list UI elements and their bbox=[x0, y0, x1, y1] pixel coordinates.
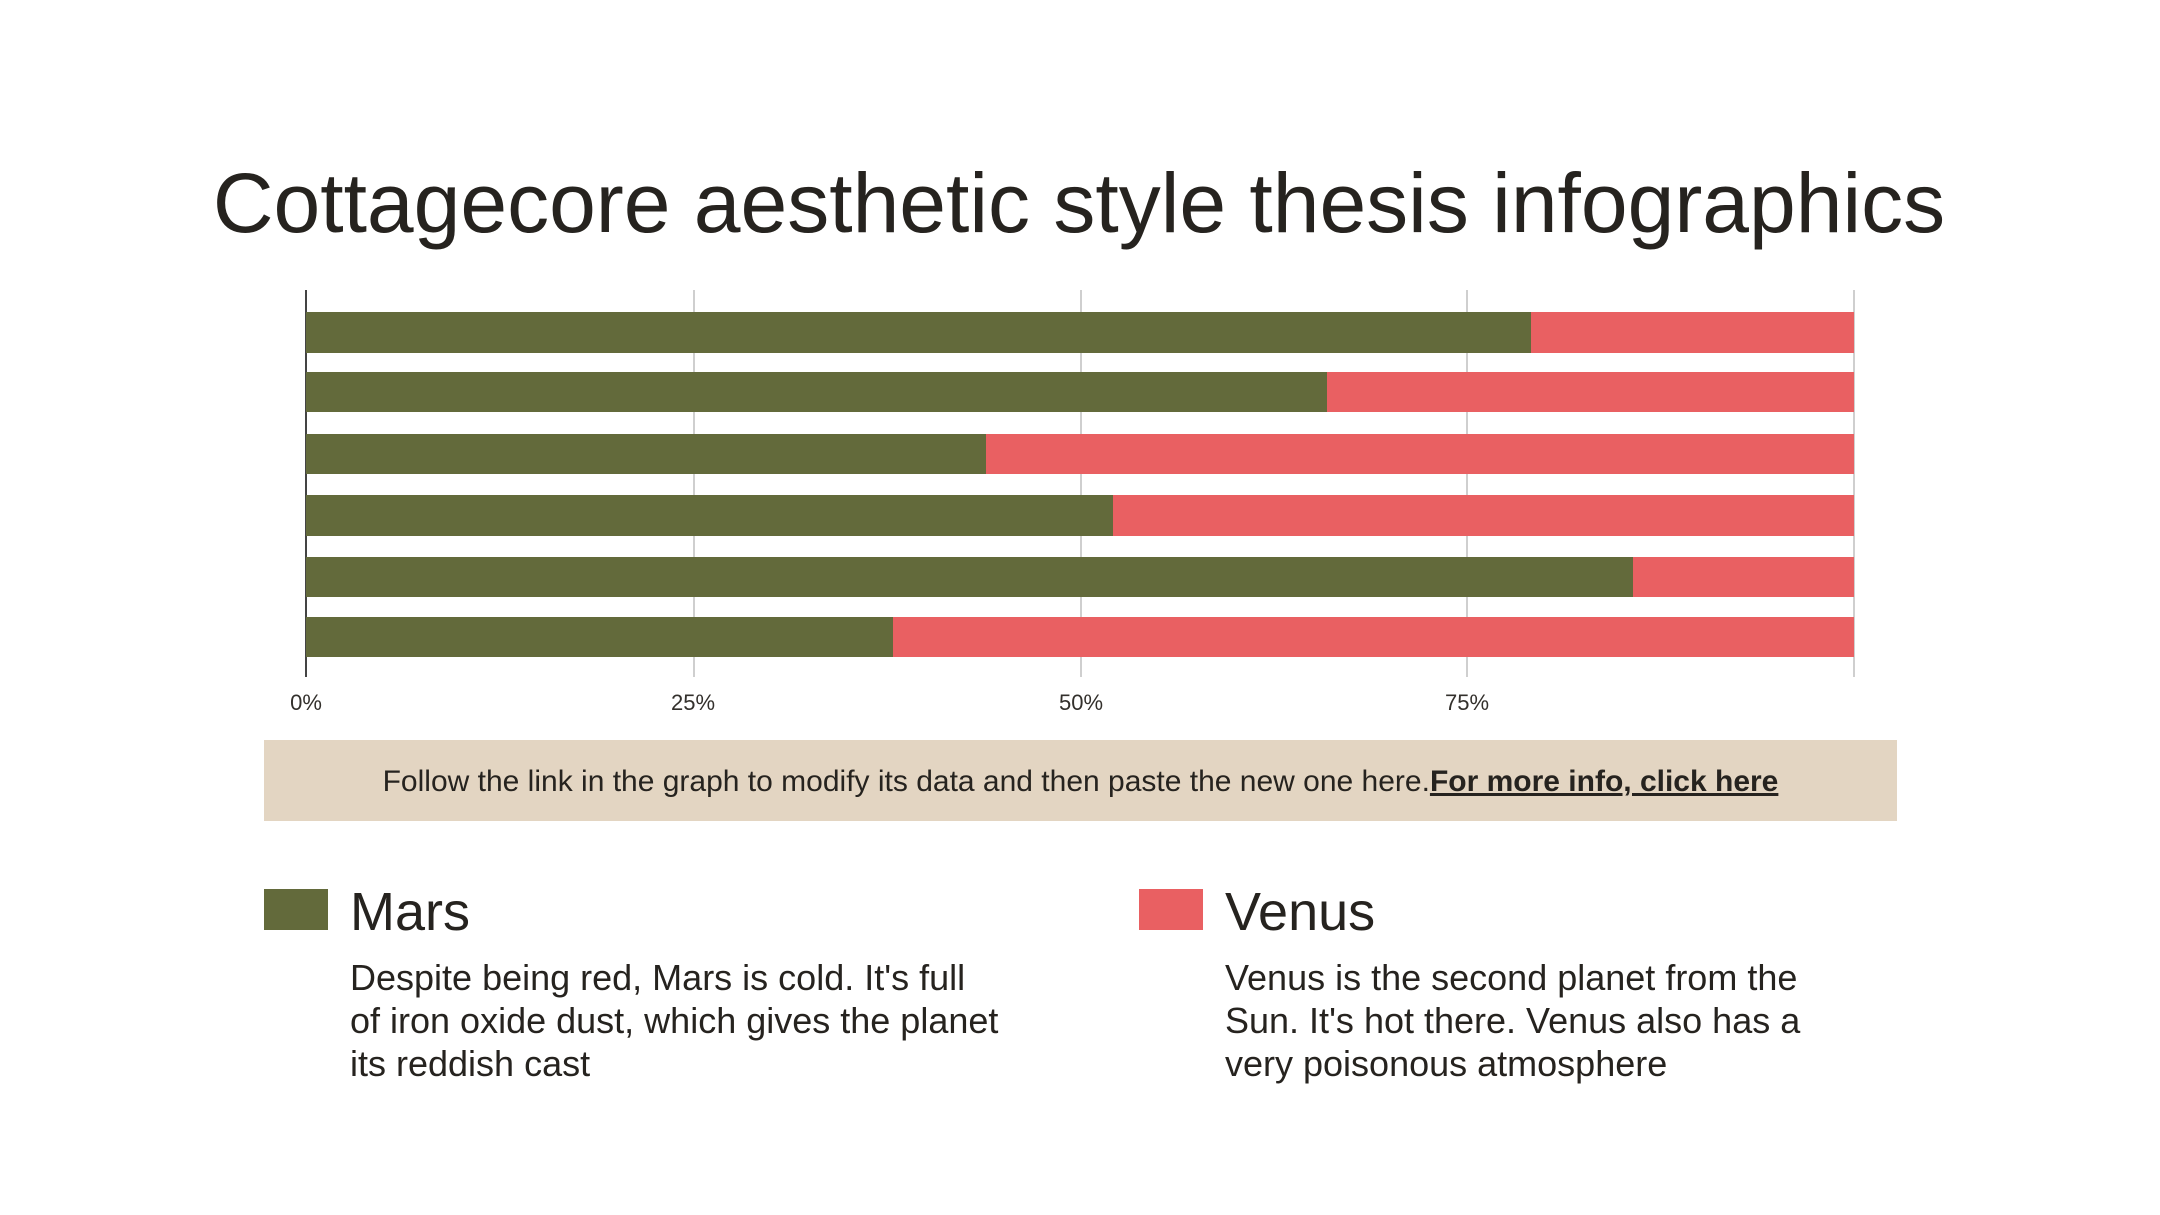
legend text: Venus: Venus is the second planet from the bbox=[1225, 957, 1797, 998]
legend swatch: Mars bbox=[264, 889, 328, 930]
legend text: Venus bbox=[1225, 957, 1800, 1084]
info banner: Follow the link in the graph to modify its data and then paste the new one here.For more info, click here bbox=[383, 765, 1778, 798]
bar row 1 bbox=[306, 312, 1854, 353]
axis label 75%: 75% bbox=[1445, 690, 1489, 715]
legend heading: Mars: Mars bbox=[350, 882, 470, 942]
legend text: Mars: Despite being red, Mars is cold. It's full bbox=[350, 957, 965, 998]
title: Cottagecore aesthetic style thesis infographics bbox=[213, 156, 1945, 250]
bar row 5 bbox=[306, 557, 1854, 597]
bar row 4 bbox=[306, 495, 1854, 536]
axis label 0%: 0% bbox=[290, 690, 322, 715]
legend text: Venus: Sun. It's hot there. Venus also has a bbox=[1225, 1000, 1800, 1041]
axis label 25%: 25% bbox=[671, 690, 715, 715]
info banner bbox=[264, 740, 1897, 821]
axis label 50%: 50% bbox=[1059, 690, 1103, 715]
legend swatch: Venus bbox=[1139, 889, 1203, 930]
legend heading: Venus: Venus bbox=[1225, 882, 1375, 942]
legend text: Mars bbox=[350, 957, 998, 1084]
bar row 6 bbox=[306, 617, 1854, 657]
bar row 2 bbox=[306, 372, 1854, 412]
legend text: Mars: its reddish cast bbox=[350, 1043, 590, 1084]
chart axis and grid lines bbox=[305, 290, 1855, 677]
bar row 3 bbox=[306, 434, 1854, 474]
legend text: Venus: very poisonous atmosphere bbox=[1225, 1043, 1667, 1084]
legend text: Mars: of iron oxide dust, which gives the planet bbox=[350, 1000, 998, 1041]
